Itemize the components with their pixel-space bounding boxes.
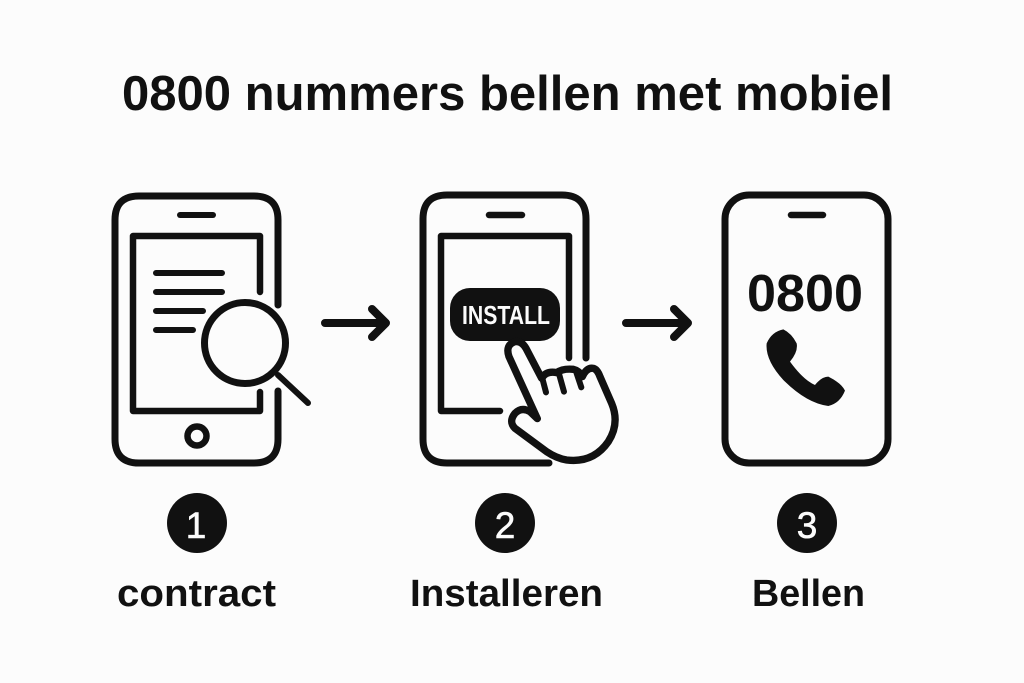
title: 0800 nummers bellen met mobiel [122,67,893,121]
panel: step 3 phone calling 0800 [725,195,888,463]
screen outline [133,236,260,411]
step 1 badge [167,493,227,553]
phone body [725,195,888,463]
phone body [423,195,586,463]
step 3 badge [777,493,837,553]
label: Bellen: Bellen [752,573,865,615]
arrow 1 [325,309,386,337]
install button: INSTALL [462,300,550,330]
phone body [115,196,278,463]
home button [188,426,206,446]
document text lines [156,273,222,330]
panel: step 1 phone with magnifier [115,196,308,463]
step 3 badge: 3 [797,505,817,546]
screen outline [441,236,569,411]
speaker [489,212,522,218]
label: contract: contract [117,573,276,615]
install button [450,288,560,341]
icon: handset [767,329,845,406]
arrow 2 [626,309,688,337]
speaker [791,212,823,218]
speaker [180,212,213,218]
phone number: 0800 [747,265,863,323]
step 1 badge: 1 [186,505,206,546]
step 2 badge [475,493,535,553]
step 2 badge: 2 [495,505,515,546]
icon: pointing hand [508,342,615,460]
panel: step 2 phone with install button [423,195,615,463]
label: Installeren: Installeren [410,573,603,615]
magnifier [204,302,308,403]
